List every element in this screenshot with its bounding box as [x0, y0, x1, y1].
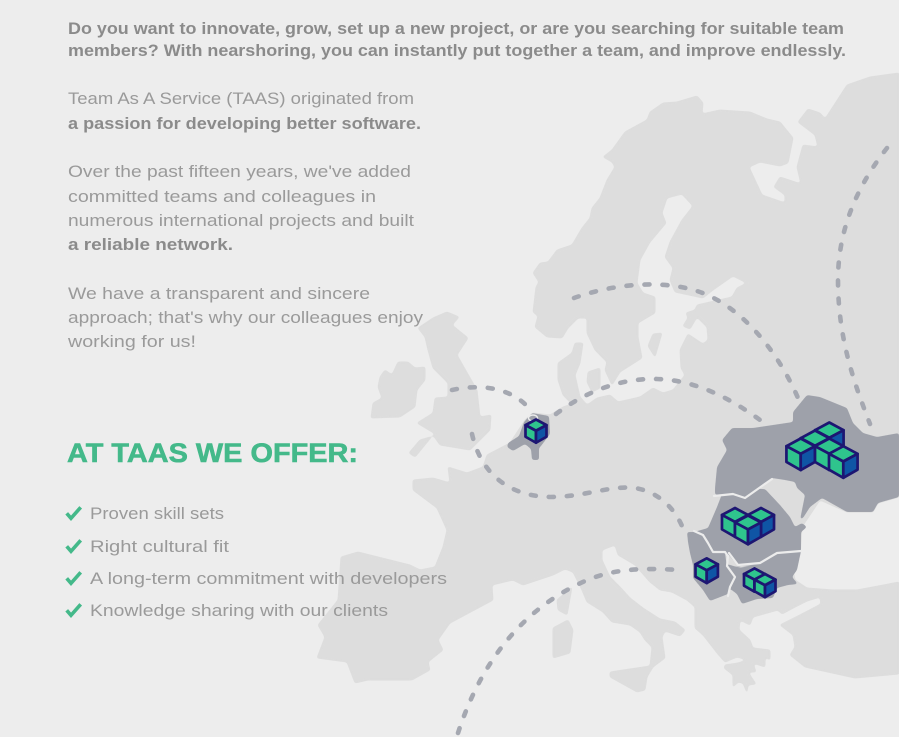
- text block: network: Over the past fifteen years, we've added: [68, 163, 411, 181]
- text block: network: a reliable network.: [68, 236, 233, 254]
- highlighted country: Bulgaria: [727, 551, 801, 604]
- country borders: [528, 415, 801, 596]
- list item: right cultural fit: Right cultural fit: [90, 537, 229, 556]
- icon: Ukraine team cubes: [786, 422, 858, 478]
- text block: approach: We have a transparent and sincere: [68, 285, 370, 303]
- icon: Bulgaria team cubes: [744, 568, 776, 597]
- text block: network: committed teams and colleagues in: [68, 188, 376, 206]
- list item: knowledge sharing: Knowledge sharing with our clients: [90, 601, 388, 620]
- heading: at TAAS we offer: AT TAAS WE OFFER:: [67, 438, 358, 468]
- highlighted countries: [507, 395, 899, 604]
- list item: long-term commitment: A long-term commitment with developers: [90, 569, 447, 588]
- list item: proven skill sets: Proven skill sets: [90, 504, 224, 523]
- landmass: Great Britain: [409, 312, 491, 457]
- intro text: members? With nearshoring, you can instantly put together a team, and improve endlessly.: [68, 42, 846, 60]
- offer list: [67, 504, 447, 620]
- landmass: mainland Europe: [317, 73, 899, 693]
- intro text: Do you want to innovate, grow, set up a new project, or are you searching for suitable team: [68, 20, 844, 38]
- intro text: [68, 20, 846, 60]
- highlighted country: Netherlands: [507, 413, 550, 460]
- text block: origin: [68, 90, 421, 133]
- text block: network: [68, 163, 414, 254]
- highlighted country: Serbia: [687, 532, 735, 601]
- dashed connection routes: [452, 148, 887, 733]
- text block: approach: working for us!: [67, 333, 196, 351]
- landmass: Ireland: [371, 362, 425, 418]
- landmass: Mediterranean and Baltic islands: [553, 333, 662, 658]
- landmasses: [317, 73, 899, 693]
- icon: Romania team cubes: [722, 508, 774, 544]
- highlighted country: Romania: [694, 489, 807, 566]
- icon: Serbia team cube: [696, 558, 718, 583]
- highlighted country: Ukraine: [715, 395, 899, 520]
- icon: Netherlands team cube: [526, 420, 546, 443]
- text block: origin: a passion for developing better software.: [68, 115, 421, 133]
- text block: approach: [67, 285, 424, 351]
- text block: origin: Team As A Service (TAAS) originated from: [68, 90, 414, 108]
- map of Europe: [317, 73, 899, 693]
- text block: network: numerous international projects and built: [68, 212, 414, 230]
- text block: approach: approach; that's why our colleagues enjoy: [68, 309, 424, 327]
